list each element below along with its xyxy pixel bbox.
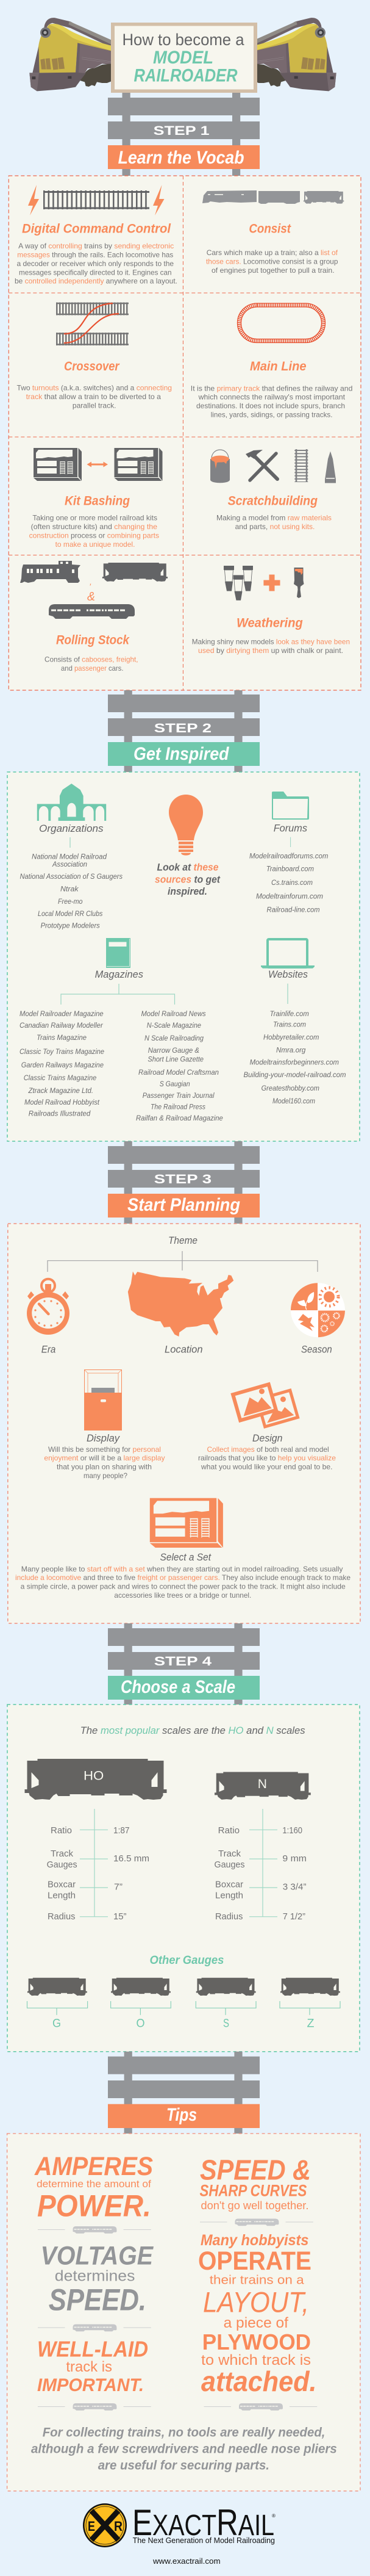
tip: well-laid track (37, 2337, 148, 2395)
step 4 signpost: STEP 4 (154, 1654, 212, 1669)
callout: light bulb: Look at these (157, 862, 218, 873)
icon: crossing logo (83, 2503, 127, 2547)
other gauges (27, 1954, 340, 2030)
tip: voltage: determines (55, 2267, 135, 2284)
list: organizations: Association (52, 860, 87, 868)
callout: light bulb: inspired. (168, 886, 207, 897)
registered mark: ® (272, 2513, 276, 2519)
text: design description: railroads that you like to help you visualize (198, 1454, 336, 1462)
theme: location: Location (165, 1344, 203, 1355)
gauge G: G (52, 2018, 61, 2030)
labels: HO specifications: Length (48, 1891, 76, 1901)
list: magazines left: Canadian Railway Modeller (20, 1021, 104, 1030)
text: ampersand: & (87, 590, 95, 604)
list: forums: Trainboard.com (266, 865, 314, 873)
step 1 signpost (108, 93, 260, 176)
text: display description: enjoyment or will it be a large display (44, 1454, 165, 1462)
text: digital command control description: messages through the rails. Each locomotive has (17, 250, 173, 259)
step 4 signpost (108, 1623, 260, 1705)
tip: hobbyists operate on plywood (198, 2232, 317, 2397)
text: design description (198, 1445, 336, 1471)
callout: light bulb: sources to get (155, 874, 221, 886)
text: display description: Will this be something for personal (48, 1445, 161, 1454)
labels: N specifications: Radius (215, 1911, 243, 1922)
text: scratchbuilding description: and parts, not using kits. (235, 522, 315, 531)
list: magazines right (136, 1009, 223, 1122)
list: magazines left: Model Railroad Hobbyist (24, 1098, 100, 1106)
list: forums (249, 852, 328, 914)
list: websites: Nmra.org (276, 1046, 306, 1055)
icon: hopper car (102, 563, 168, 582)
tip: tools: although a few screwdrivers and needle nose pliers (31, 2442, 337, 2456)
labels: N specifications: Gauges (215, 1860, 245, 1870)
list: magazines right: Railroad Model Craftsman (138, 1068, 219, 1077)
heading: theme: Theme (168, 1235, 197, 1246)
tip: tools: For collecting trains, no tools are really needed, (43, 2425, 325, 2439)
list: magazines right: Short Line Gazette (148, 1055, 204, 1064)
list: forums: Modelrailroadforums.com (249, 852, 328, 860)
tip: hobbyists operate on plywood: attached. (201, 2365, 317, 2397)
icon: N boxcar: N (258, 1777, 267, 1791)
cell: kit bashing: Kit Bashing (65, 494, 130, 508)
list: websites (244, 1009, 346, 1105)
cell: scratchbuilding (210, 449, 336, 531)
list: websites: Greatesthobby.com (261, 1084, 319, 1092)
magazines column (20, 938, 223, 1122)
divider: train (38, 2226, 151, 2234)
text: kit bashing description: construction process or combining parts (29, 531, 159, 539)
list: magazines left: Classic Toy Trains Magazine (20, 1047, 104, 1056)
gauge Z (280, 1978, 340, 2030)
N scale (215, 1772, 311, 1922)
text: design description: Collect images of both real and model (207, 1445, 329, 1454)
labels: N specifications: Ratio (218, 1825, 240, 1836)
text: kit bashing description: to make a unique model. (55, 540, 135, 549)
tip: hobbyists operate on plywood: OPERATE (198, 2246, 311, 2276)
theme: era: Era (41, 1344, 55, 1355)
tips signpost (108, 2052, 260, 2134)
list: organizations: National Model Railroad (32, 853, 107, 861)
text: crossover description: parallel track. (73, 401, 116, 409)
divider: train (38, 2324, 151, 2331)
list: magazines left: Railroads Illustrated (29, 1109, 91, 1118)
list: websites: Model160.com (272, 1097, 315, 1105)
tip: amperes: AMPERES (34, 2152, 153, 2181)
icon: organizations building (37, 784, 106, 821)
text: digital command control description: A way of controlling trains by sending electronic (18, 242, 174, 250)
step 2 signpost: STEP 2 (154, 721, 212, 735)
tip: voltage: VOLTAGE (41, 2242, 154, 2271)
text: consist description (206, 248, 338, 275)
text: kit bashing description: (often structure kits) and changing the (31, 522, 157, 531)
cell: kit bashing (29, 448, 162, 549)
tip: voltage (41, 2242, 154, 2317)
tip: speed and sharp curves: SPEED & (200, 2154, 311, 2186)
labels: N specifications: Boxcar (215, 1880, 243, 1890)
list: organizations: Prototype Modelers (41, 922, 100, 930)
sub-section: select a set: Select a Set (160, 1551, 212, 1563)
tip: well-laid track: WELL-LAID (37, 2337, 148, 2362)
other gauges: Other Gauges (150, 1954, 224, 1967)
panel: get inspired (7, 772, 360, 1141)
icon: crossover tracks (56, 303, 129, 344)
magazines column: Magazines (95, 969, 143, 980)
list: organizations: Ntrak (60, 885, 79, 893)
text: weathering description: used by dirtying them up with chalk or paint. (198, 646, 343, 655)
list: magazines left: Model Railroader Magazine (20, 1009, 104, 1018)
text: select a set description: a simple circle, a power pack and wires to connect the power pack to the track. It might also include (21, 1582, 346, 1591)
cell: main line: Main Line (250, 359, 307, 373)
footer: ExactRail logo (83, 2502, 276, 2566)
gauge S: S (223, 2018, 229, 2030)
text: display description: that you plan on sharing with (57, 1463, 152, 1471)
list: forums: Modeltrainforum.com (256, 892, 323, 901)
list: websites: Modeltrainsforbeginners.com (250, 1058, 339, 1067)
labels: HO specifications (47, 1825, 149, 1922)
text: design description: what you would like your end goal to be. (201, 1463, 333, 1471)
text: scratchbuilding description (216, 513, 332, 531)
icon: oval track (238, 303, 326, 343)
labels: HO specifications: 16.5 mm (113, 1853, 149, 1864)
text: weathering description: Making shiny new models look as they have been (192, 638, 350, 646)
list: magazines left: Classic Trains Magazine (24, 1073, 97, 1082)
HO scale (24, 1759, 167, 1922)
step 1 signpost: Learn the Vocab (118, 148, 244, 168)
icon: train consist silhouette (202, 190, 344, 204)
theme: season: Season (301, 1344, 332, 1355)
panel: choose a scale (7, 1705, 360, 2052)
list: organizations: National Association of S Gaugers (20, 872, 123, 881)
heading: popular scales: The most popular scales are the HO and N scales (80, 1725, 305, 1736)
labels: HO specifications: Ratio (51, 1825, 72, 1836)
icon: HO boxcar (24, 1759, 167, 1800)
panel: tips (7, 2134, 360, 2491)
text: consist description: of engines put together to pull a train. (212, 266, 335, 275)
forums column (249, 792, 328, 914)
divider: train (200, 2218, 313, 2226)
cell: scratchbuilding: Scratchbuilding (228, 494, 318, 508)
gauge S (196, 1978, 256, 2030)
list: magazines right: S Gaugian (160, 1080, 190, 1088)
tip: well-laid track: IMPORTANT. (37, 2375, 144, 2395)
list: websites: Building-your-model-railroad.com (244, 1070, 346, 1079)
tip: voltage: SPEED. (49, 2283, 146, 2317)
icon: paint tubes and brush (224, 566, 304, 601)
icon: N boxcar (215, 1772, 311, 1800)
list: magazines right: Narrow Gauge & (148, 1046, 199, 1055)
labels: HO specifications: 15” (113, 1911, 127, 1922)
tip: hobbyists operate on plywood: LAYOUT, (203, 2286, 309, 2318)
list: magazines right: N-Scale Magazine (147, 1021, 201, 1030)
list: forums: Railroad-line.com (267, 906, 320, 914)
text: comma: , (90, 577, 92, 586)
list: magazines left: Ztrack Magazine Ltd. (28, 1086, 93, 1095)
sub-section: display (44, 1369, 165, 1480)
divider: train (204, 2403, 317, 2411)
text: weathering description (192, 638, 350, 655)
list: websites: Hobbyretailer.com (263, 1033, 319, 1042)
labels: HO specifications: Gauges (47, 1860, 77, 1870)
tip: speed and sharp curves: SHARP CURVES (200, 2181, 307, 2199)
text: kit bashing description: Taking one or more model railroad kits (32, 513, 157, 522)
list: websites: Trains.com (273, 1020, 306, 1029)
step 3 signpost (108, 1141, 260, 1224)
cell: rolling stock: Rolling Stock (56, 633, 130, 648)
cell: weathering (192, 566, 350, 655)
list: magazines left: Trains Magazine (37, 1033, 87, 1042)
tip: amperes: determine the amount of (37, 2178, 151, 2190)
text: rolling stock description: and passenger cars. (61, 664, 124, 673)
organizations column (20, 784, 123, 930)
gauge G (27, 1978, 88, 2030)
labels: N specifications: 1:160 (282, 1825, 302, 1836)
text: rolling stock description: Consists of cabooses, freight, (44, 655, 138, 664)
labels: HO specifications: 1:87 (113, 1825, 129, 1836)
gauge O: O (137, 2018, 145, 2030)
text: digital command control description (15, 242, 177, 286)
labels: HO specifications: Boxcar (48, 1880, 76, 1890)
tip: hobbyists operate on plywood: their trains on a (210, 2274, 305, 2287)
step 1 signpost: STEP 1 (154, 124, 210, 138)
text: main line description: destinations. It does not include spurs, branch (196, 402, 345, 410)
gauge O (111, 1978, 171, 2030)
labels: HO specifications: Radius (48, 1911, 76, 1922)
forums column: Forums (274, 823, 307, 834)
callout: light bulb (155, 795, 221, 897)
title sign: MODEL (153, 48, 213, 68)
labels: N specifications: 3 3/4” (283, 1882, 307, 1892)
text: select a set description: include a locomotive and three to five freight or passenger cars. They also include enough track to make (15, 1573, 350, 1582)
url: www.exactrail.com (152, 2556, 221, 2566)
text: digital command control description: messages specifically directed to it. Engines can (19, 268, 172, 276)
icon: stopwatch (27, 1279, 69, 1335)
icon: right locomotive (255, 18, 336, 91)
icon: kit boxes with arrow (34, 448, 162, 481)
list: magazines right: Railfan & Railroad Magazine (136, 1114, 223, 1122)
header (29, 18, 336, 93)
labels: N specifications: 9 mm (282, 1853, 307, 1864)
step 2 signpost (108, 690, 260, 772)
tips signpost: Tips (166, 2105, 197, 2125)
cell: digital command control (15, 185, 177, 286)
list: magazines right: Passenger Train Journal (143, 1091, 215, 1100)
labels: N specifications: Length (215, 1891, 243, 1901)
step 3 signpost: Start Planning (127, 1195, 240, 1215)
list: organizations (20, 853, 123, 930)
text: digital command control description: be controlled independently anywhere on a layout. (15, 277, 177, 286)
icon: map of the United States (128, 1271, 233, 1337)
sub-section: design (198, 1384, 336, 1471)
labels: N specifications: 7 1/2” (283, 1911, 305, 1922)
text: select a set description: Many people like to start off with a set when they are starting out in model railroading. Sets usually (21, 1565, 343, 1573)
theme: season (291, 1283, 345, 1355)
tip: tools (31, 2425, 337, 2473)
icon: four seasons (291, 1283, 345, 1337)
icon: laptop (261, 939, 315, 969)
text: main line description: lines, yards, sidings, or passing tracks. (211, 411, 333, 419)
cell: main line (191, 303, 352, 419)
cell: crossover (17, 303, 172, 409)
title sign (111, 23, 257, 93)
tip: speed and sharp curves: don't go well together. (201, 2199, 308, 2212)
text: select a set description (15, 1565, 350, 1600)
cell: consist (202, 190, 344, 275)
list: magazines right: Model Railroad News (141, 1009, 206, 1018)
icon: HO boxcar: HO (84, 1769, 104, 1783)
text: kit bashing description (29, 513, 159, 549)
list: organizations: Local Model RR Clubs (38, 909, 102, 918)
list: websites: Trainlife.com (269, 1009, 309, 1018)
icon: passenger car (49, 604, 135, 619)
text: main line description (191, 384, 352, 419)
icon: crossing logo: R (114, 2519, 123, 2534)
cell: weathering: Weathering (237, 616, 303, 630)
tip: hobbyists operate on plywood: Many hobbyists (201, 2232, 308, 2249)
tip: hobbyists operate on plywood: a piece of (224, 2315, 288, 2331)
text: crossover description: Two turnouts (a.k.a. switches) and a connecting (17, 383, 172, 392)
sub-section: design: Design (252, 1432, 283, 1444)
organizations column: Organizations (39, 823, 104, 834)
text: digital command control description: a decoder or receiver which only responds to the (17, 259, 174, 268)
sub-section: display: Display (87, 1432, 120, 1444)
tip: hobbyists operate on plywood: to which track is (201, 2352, 311, 2369)
text: consist description: those cars. Locomotive consist is a group (206, 258, 338, 266)
tip: speed and sharp curves (200, 2154, 311, 2212)
icon: powered track (28, 185, 165, 215)
websites column: Websites (268, 969, 308, 980)
gauge Z: Z (307, 2018, 315, 2030)
cell: consist: Consist (249, 222, 291, 236)
step 3 signpost: STEP 3 (154, 1172, 212, 1186)
text: select a set description: accessories like trees or a bridge or tunnel. (114, 1591, 251, 1600)
step 4 signpost: Choose a Scale (121, 1677, 235, 1697)
tip: tools: are useful for securing parts. (98, 2459, 269, 2473)
title sign: How to become a (122, 31, 244, 49)
text: main line description: It is the primary track that defines the railway and (191, 384, 352, 393)
list: magazines right: N Scale Railroading (144, 1034, 204, 1042)
labels: N specifications (215, 1825, 307, 1922)
websites column (244, 939, 346, 1105)
text: rolling stock description (44, 655, 138, 673)
text: scratchbuilding description: Making a model from raw materials (216, 513, 332, 522)
icon: paint can and tools (210, 449, 336, 483)
text: main line description: which connects the railway's most important (198, 393, 346, 402)
theme: location (128, 1271, 233, 1355)
list: magazines right: The Railroad Press (151, 1103, 205, 1111)
icon: photographs (233, 1384, 298, 1427)
icon: magazine (106, 938, 130, 968)
tip: amperes: POWER. (37, 2189, 151, 2223)
text: display description: many people? (84, 1471, 127, 1480)
tagline: The Next Generation of Model Railroading (133, 2536, 275, 2545)
icon: left locomotive (29, 18, 111, 91)
step 2 signpost: Get Inspired (133, 744, 229, 764)
icon: train set box (150, 1498, 223, 1548)
icon: display case (84, 1369, 122, 1431)
cell: digital command control: Digital Command Control (22, 222, 171, 236)
theme: era (27, 1279, 69, 1355)
list: magazines left: Garden Railways Magazine (21, 1061, 104, 1069)
wordmark: EXACTRAIL (132, 2502, 274, 2543)
divider: train (38, 2403, 151, 2411)
list: forums: Cs.trains.com (271, 878, 313, 887)
panel: vocabulary (9, 176, 361, 690)
labels: HO specifications: 7” (114, 1882, 123, 1892)
text: consist description: Cars which make up a train; also a list of (207, 248, 338, 257)
list: organizations: Free-mo (58, 897, 83, 906)
title sign: RAILROADER (134, 66, 238, 85)
icon: caboose (20, 561, 80, 583)
labels: N specifications: Track (218, 1849, 241, 1859)
list: magazines left (20, 1009, 104, 1118)
cell: crossover: Crossover (64, 359, 120, 373)
text: display description (44, 1445, 165, 1480)
icon: crossing logo: E (88, 2519, 95, 2534)
tip: well-laid track: track is (66, 2359, 112, 2375)
icon: folder (272, 792, 309, 820)
panel: start planning (8, 1224, 360, 1623)
tip: hobbyists operate on plywood: PLYWOOD (202, 2329, 311, 2354)
text: crossover description: track that allow a train to be diverted to a (26, 392, 161, 401)
labels: HO specifications: Track (51, 1849, 73, 1859)
cell: rolling stock (20, 561, 168, 673)
sub-section: select a set (15, 1498, 350, 1600)
tip: amperes (34, 2152, 153, 2223)
text: crossover description (17, 383, 172, 409)
